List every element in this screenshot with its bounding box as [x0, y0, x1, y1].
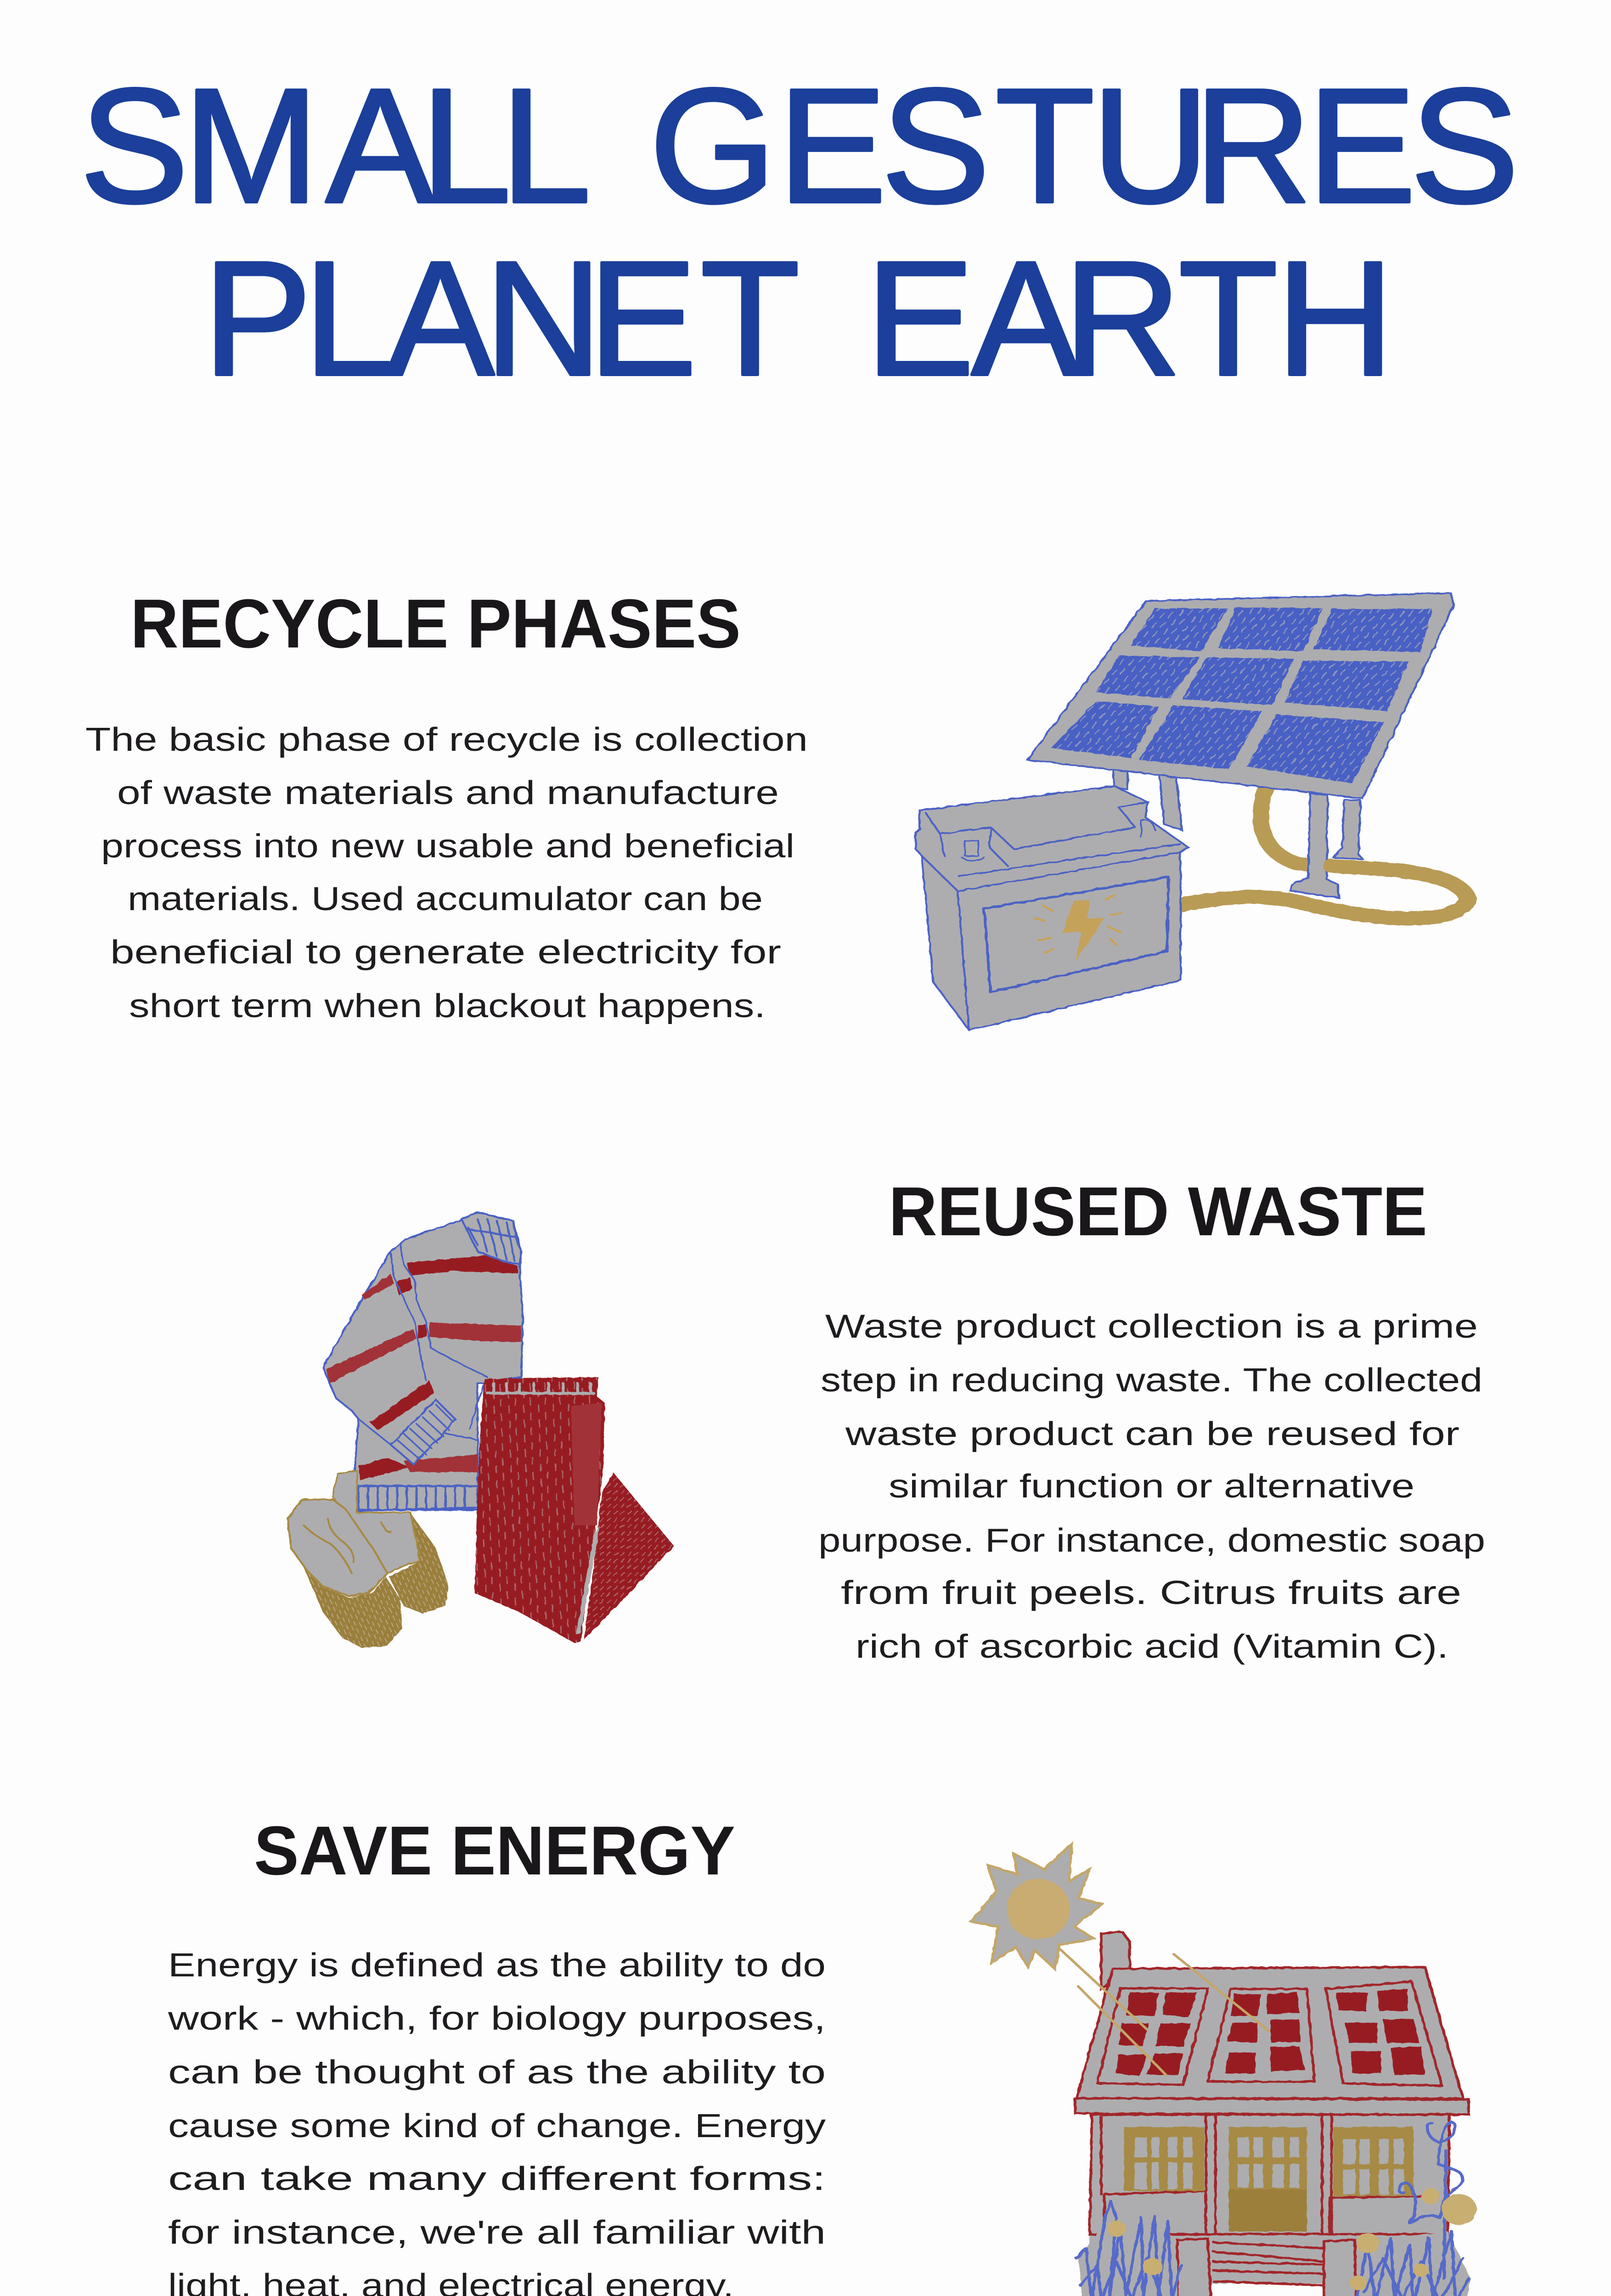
heading: recycle phases: RECYCLE PHASES [130, 585, 741, 662]
battery [916, 786, 1189, 1030]
flowers [1107, 2188, 1476, 2290]
roof [1075, 1967, 1469, 2115]
text block: reused waste: rich of ascorbic acid (Vitamin C). [856, 1628, 1448, 1665]
walls [1090, 2115, 1450, 2235]
text block: recycle phases [85, 721, 808, 1024]
panel: save energy [168, 1812, 1476, 2296]
text block: recycle phases: process into new usable and beneficial [101, 828, 794, 865]
plants [1076, 2122, 1470, 2296]
text block: save energy: Energy is defined as the ability to do [168, 1947, 826, 1984]
text block: reused waste: purpose. For instance, domestic soap [818, 1522, 1485, 1559]
text block: reused waste: step in reducing waste. The collected [821, 1362, 1482, 1399]
text block: save energy: can be thought of as the ability to [168, 2054, 826, 2091]
panel: reused waste [287, 1172, 1485, 1665]
sweater collar [462, 1212, 521, 1264]
text block: recycle phases: materials. Used accumulator can be [128, 881, 763, 917]
left window [1124, 2127, 1204, 2191]
door [1229, 2127, 1307, 2231]
text block: recycle phases: The basic phase of recycle is collection [85, 721, 808, 758]
porch steps [1090, 2234, 1440, 2296]
text block: reused waste: Waste product collection is a prime [825, 1308, 1478, 1345]
heading: save energy: SAVE ENERGY [254, 1812, 735, 1889]
sweater hem [354, 1486, 478, 1510]
text block: reused waste [818, 1308, 1485, 1665]
skirt [474, 1377, 674, 1643]
panel legs [1114, 769, 1363, 898]
icon: solar panel and battery [916, 593, 1468, 1030]
text block: save energy: work - which, for biology purposes, [168, 2000, 826, 2037]
cable behind legs [1261, 787, 1332, 866]
cable front [1182, 866, 1468, 918]
sweater [323, 1212, 523, 1511]
slippers [287, 1470, 449, 1648]
right window [1334, 2127, 1414, 2196]
text block: reused waste: from fruit peels. Citrus fruits are [841, 1575, 1461, 1611]
title [80, 55, 1519, 410]
text block: recycle phases: short term when blackout happens. [129, 988, 766, 1024]
icon: house with solar roof and sun [971, 1844, 1476, 2296]
text block: save energy [168, 1947, 826, 2296]
title: SMALL GESTURES [80, 55, 1519, 237]
sun rays [1060, 1949, 1269, 2075]
text block: save energy: can take many different forms: [168, 2161, 826, 2197]
text block: save energy: for instance, we're all familiar with [168, 2214, 826, 2251]
sweater cuff [391, 1400, 455, 1464]
icon: sweater, skirt and slippers [287, 1212, 674, 1648]
text block: reused waste: waste product can be reused for [845, 1416, 1459, 1452]
chimney [1101, 1932, 1130, 1989]
text block: recycle phases: beneficial to generate electricity for [110, 934, 781, 971]
text block: recycle phases: of waste materials and manufacture [117, 775, 779, 811]
solar panel frame [1028, 593, 1454, 799]
title: PLANET EARTH [203, 228, 1394, 410]
heading: reused waste: REUSED WASTE [889, 1172, 1427, 1250]
sun [971, 1844, 1102, 1969]
panel: recycle phases [85, 585, 1468, 1030]
solar cells [1051, 608, 1432, 783]
text block: reused waste: similar function or alternative [889, 1468, 1414, 1505]
text block: save energy: cause some kind of change. Energy [168, 2108, 826, 2144]
